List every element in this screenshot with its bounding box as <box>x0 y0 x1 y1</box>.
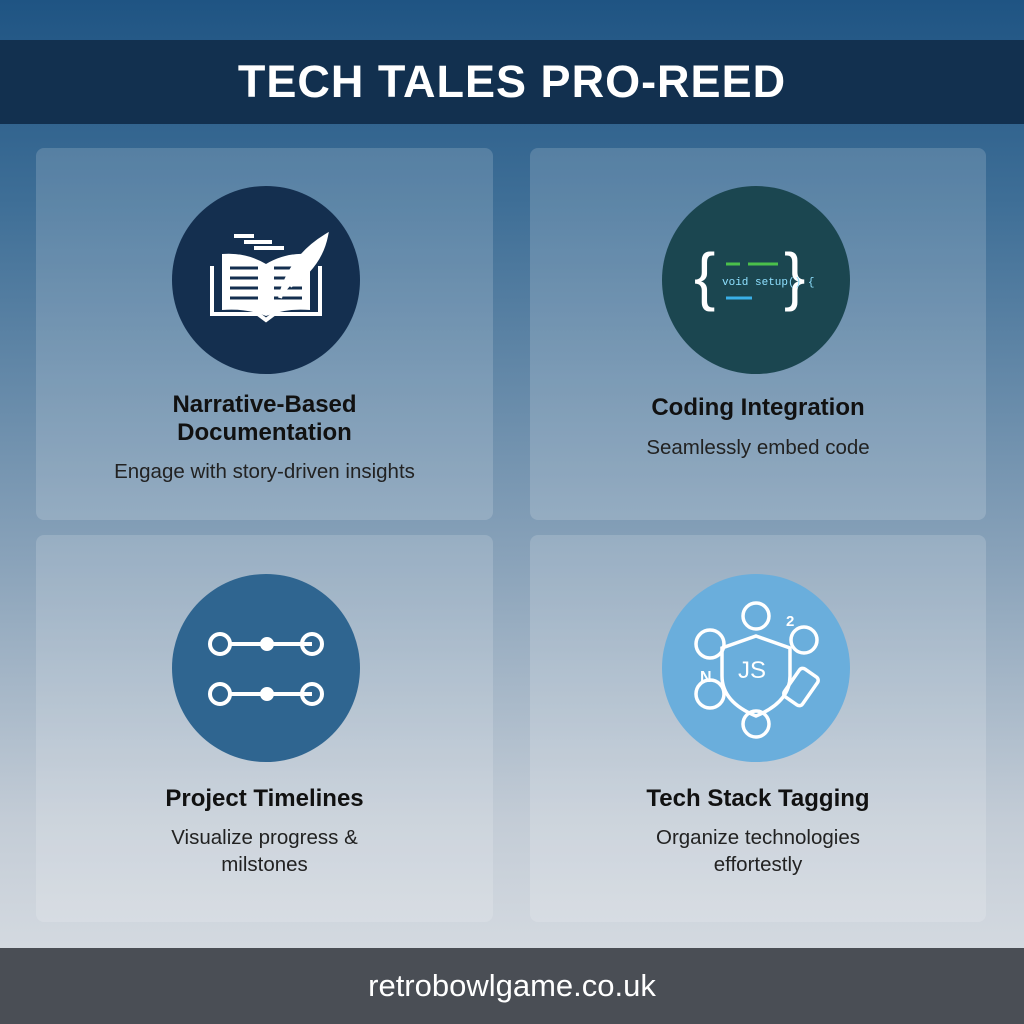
panel: timelines <box>36 535 493 922</box>
panel: coding <box>530 148 986 520</box>
footer <box>0 948 1024 1024</box>
title: TECH TALES PRO-REED <box>238 56 786 107</box>
text: Organize technologies <box>656 826 860 849</box>
text: milstones <box>221 853 308 876</box>
text: Seamlessly embed code <box>646 436 870 459</box>
icon: code: { <box>694 240 715 312</box>
icon: code: } <box>784 240 805 312</box>
text: Visualize progress & <box>171 826 358 849</box>
panel: narrative <box>36 148 493 520</box>
heading: Documentation <box>177 419 352 446</box>
icon: shield: N <box>700 669 712 686</box>
icon: timeline <box>172 574 360 762</box>
heading: Project Timelines <box>165 785 364 812</box>
text: Engage with story-driven insights <box>114 460 415 483</box>
heading <box>172 391 357 446</box>
heading: Tech Stack Tagging <box>646 785 870 812</box>
icon: book <box>172 186 360 374</box>
icon: shield: JS <box>738 657 766 684</box>
footer: retrobowlgame.co.uk <box>368 968 656 1003</box>
text <box>171 826 358 876</box>
icon: shield <box>662 574 850 762</box>
text <box>656 826 860 876</box>
panel: tech stack <box>530 535 986 922</box>
icon: code: void setup() { <box>722 277 814 289</box>
icon: shield: 2 <box>786 613 794 630</box>
icon: code <box>662 186 850 374</box>
title <box>0 40 1024 124</box>
heading: Coding Integration <box>651 394 865 421</box>
text: effortestly <box>714 853 802 876</box>
heading: Narrative-Based <box>172 391 357 418</box>
